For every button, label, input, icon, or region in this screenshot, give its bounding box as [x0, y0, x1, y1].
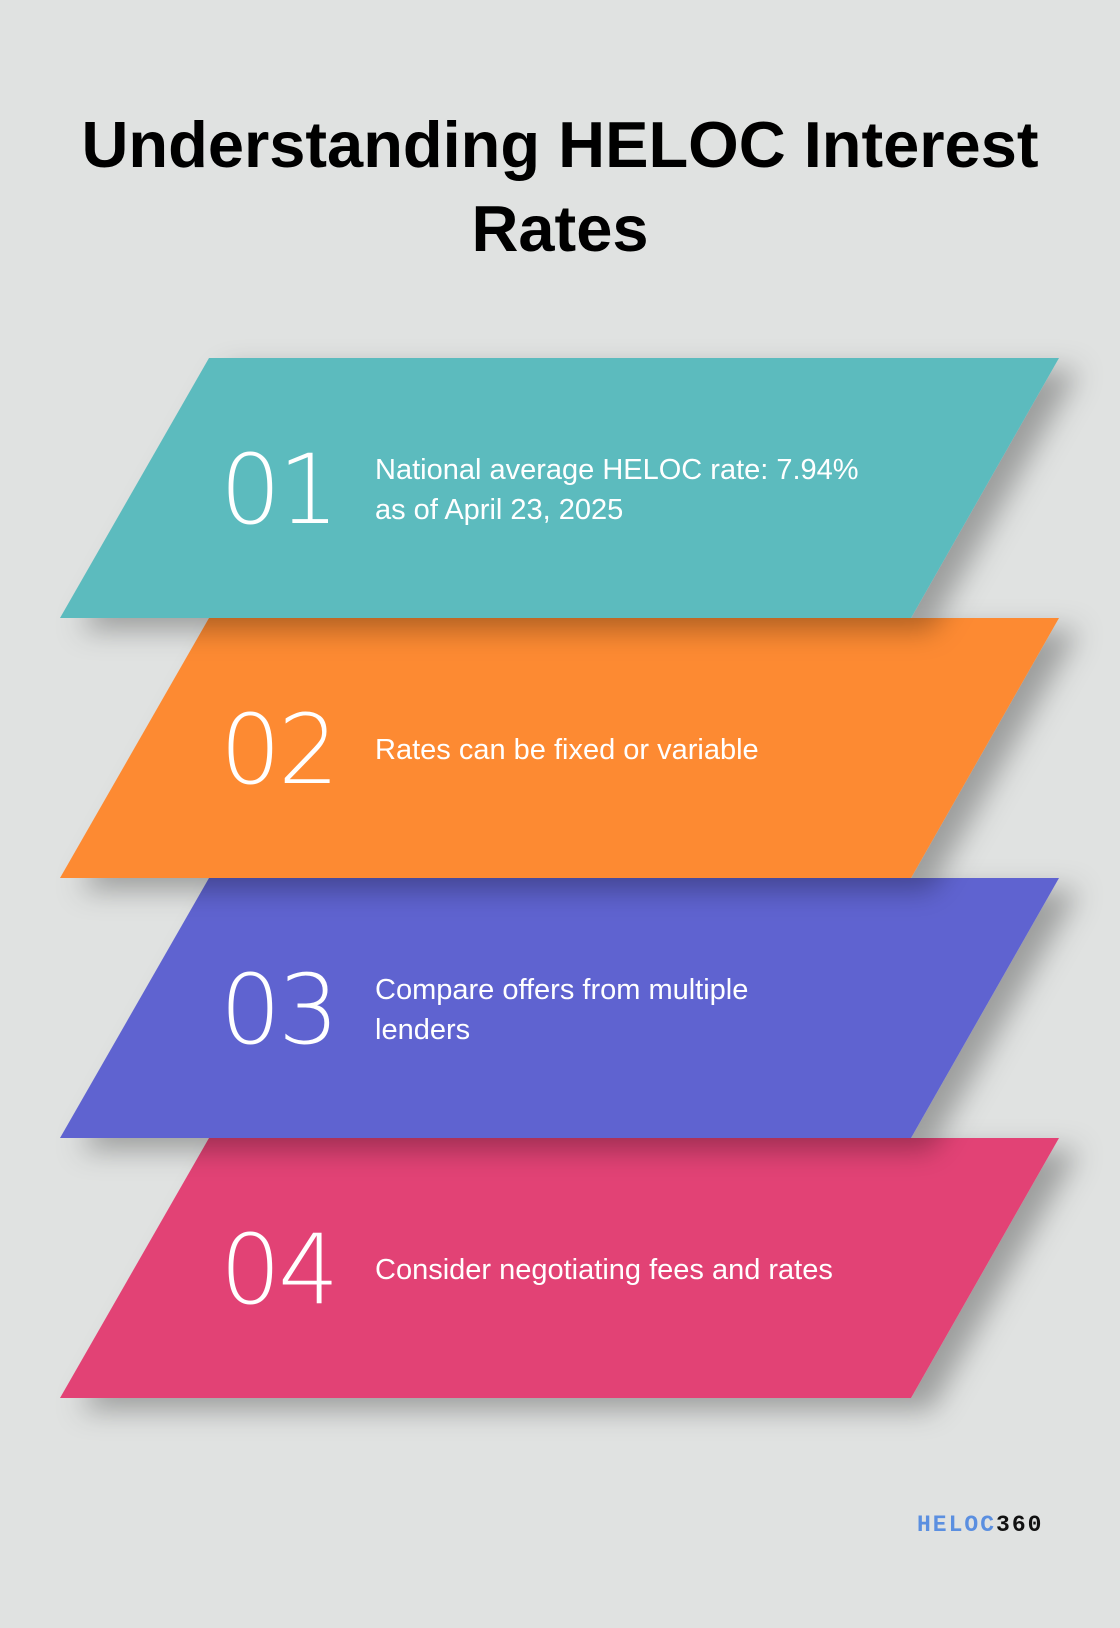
panel 03 — [60, 878, 1059, 1138]
logo: HELOC360 — [917, 1512, 1043, 1538]
panel 02 — [60, 618, 1059, 878]
text 03 — [375, 974, 748, 1046]
number 03: 03 — [220, 954, 336, 1066]
number 02: 02 — [220, 694, 336, 806]
title: Rates — [471, 192, 649, 265]
text 01: as of April 23, 2025 — [375, 494, 623, 526]
text 01: National average HELOC rate: 7.94% — [375, 454, 859, 486]
panel 01 — [60, 358, 1059, 618]
text 03: Compare offers from multiple — [375, 974, 748, 1006]
title: Understanding HELOC Interest — [81, 108, 1039, 181]
panel 04 — [60, 1138, 1059, 1398]
text 04: Consider negotiating fees and rates — [375, 1254, 833, 1286]
text 01 — [375, 454, 859, 526]
text 03: lenders — [375, 1014, 470, 1046]
title — [81, 108, 1039, 265]
number 01: 01 — [220, 434, 336, 546]
text 02: Rates can be fixed or variable — [375, 734, 759, 766]
number 04: 04 — [220, 1214, 336, 1326]
